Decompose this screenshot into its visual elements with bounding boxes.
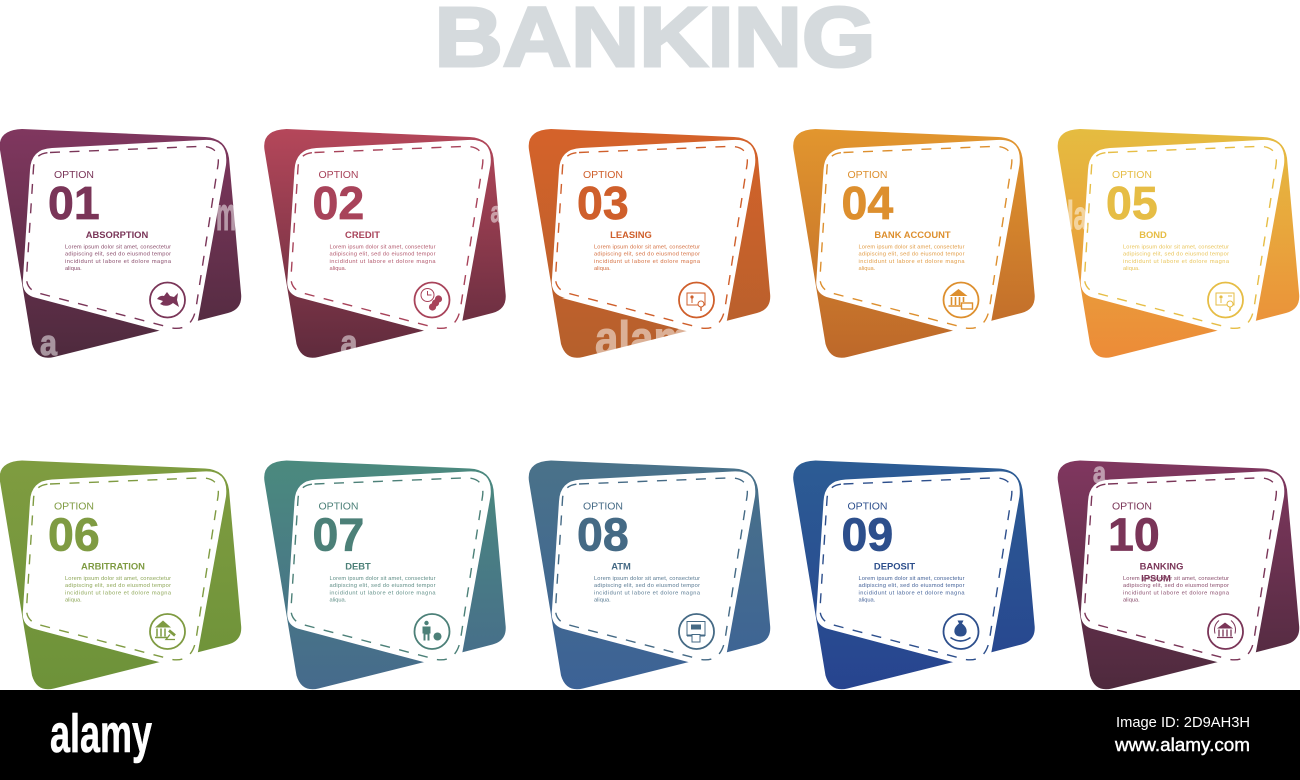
body text 06: incididunt ut labore et dolore magna	[65, 590, 172, 596]
body text 09: adipiscing elit, sed do eiusmod tempor	[858, 583, 965, 589]
body text 05	[1123, 244, 1230, 272]
heading bond: BOND	[1139, 229, 1167, 240]
number 06: 06	[48, 508, 100, 560]
option label 09: OPTION	[848, 500, 888, 512]
body text 07: adipiscing elit, sed do eiusmod tempor	[330, 583, 436, 589]
icon: person with debt coin	[414, 614, 450, 649]
panel: option 03 leasing: alam	[595, 313, 691, 366]
body text 07: aliqua.	[330, 598, 347, 604]
number 04: 04	[842, 177, 893, 229]
body text 04	[858, 244, 965, 272]
body text 04: incididunt ut labore et dolore magna	[858, 259, 965, 265]
body text 03: Lorem ipsum dolor sit amet, consectetur	[594, 244, 700, 250]
body text 08: incididunt ut labore et dolore magna	[594, 590, 701, 596]
icon: clock and coins	[414, 282, 450, 318]
body text 10: incididunt ut labore et dolore magna	[1123, 590, 1230, 596]
body text 05: Lorem ipsum dolor sit amet, consectetur	[1123, 244, 1229, 250]
body text 05: adipiscing elit, sed do eiusmod tempor	[1123, 252, 1229, 258]
body text 08	[594, 576, 701, 604]
body text 03: adipiscing elit, sed do eiusmod tempor	[594, 252, 700, 258]
body text 10: aliqua.	[1123, 598, 1140, 604]
image id: Image ID: 2D9AH3H	[1116, 714, 1250, 731]
icon: money bag over hand	[944, 614, 978, 649]
body text 06	[65, 576, 172, 604]
panel: option 05 bond: la	[1067, 194, 1087, 238]
option label 10: OPTION	[1112, 500, 1152, 512]
icon: bank in circular arrows	[1208, 614, 1243, 649]
panel: option 10 banking ipsum: a	[1093, 456, 1106, 490]
body text 03: aliqua.	[594, 266, 611, 272]
option label 04: OPTION	[848, 169, 888, 181]
panel: option 01 absorption: a	[40, 322, 58, 363]
body text 01: incididunt ut labore et dolore magna	[65, 259, 172, 265]
icon: bank and card	[944, 282, 978, 318]
body text 08: aliqua.	[594, 598, 611, 604]
panel: option 02 credit: a	[490, 196, 502, 229]
number 05: 05	[1106, 177, 1158, 229]
heading absorption: ABSORPTION	[86, 229, 148, 240]
body text 04: adipiscing elit, sed do eiusmod tempor	[858, 252, 965, 258]
body text 04: aliqua.	[858, 266, 876, 272]
heading atm: ATM	[611, 560, 631, 572]
heading leasing: LEASING	[610, 229, 652, 240]
option label 08: OPTION	[583, 500, 623, 512]
body text 07: incididunt ut labore et dolore magna	[330, 590, 436, 596]
panel: option 02 credit: a	[340, 322, 358, 363]
body text 06: aliqua.	[65, 598, 82, 604]
footer bar	[0, 690, 1300, 780]
body text 08: adipiscing elit, sed do eiusmod tempor	[594, 583, 700, 589]
panel: option 08 atm	[529, 460, 770, 689]
heading deposit: DEPOSIT	[874, 560, 915, 572]
panel: option 02 credit	[264, 129, 506, 363]
icon: bank and gavel	[150, 614, 185, 649]
panel: option 04 bank account	[793, 129, 1035, 358]
body text 10: Lorem ipsum dolor sit amet, consectetur	[1123, 576, 1229, 582]
heading banking ipsum	[1140, 560, 1183, 584]
body text 10	[1123, 576, 1230, 604]
icon: certificate key	[679, 282, 714, 318]
body text 07	[330, 576, 436, 604]
heading banking ipsum: IPSUM	[1141, 572, 1171, 584]
number 08: 08	[577, 508, 629, 560]
body text 09: incididunt ut labore et dolore magna	[858, 590, 965, 596]
body text 02: adipiscing elit, sed do eiusmod tempor	[330, 252, 436, 258]
body text 05: aliqua.	[1123, 266, 1140, 272]
body text 02: incididunt ut labore et dolore magna	[330, 259, 436, 265]
panel: option 01 absorption	[0, 129, 241, 363]
alamy logo: alamy	[50, 704, 152, 764]
body text 06: Lorem ipsum dolor sit amet, consectetur	[65, 576, 171, 582]
body text 09	[858, 576, 965, 604]
body text 01: Lorem ipsum dolor sit amet, consectetur	[65, 244, 171, 250]
body text 02: aliqua.	[330, 266, 347, 272]
option label 06: OPTION	[54, 500, 94, 512]
heading debt: DEBT	[345, 560, 371, 572]
body text 07: Lorem ipsum dolor sit amet, consectetur	[330, 576, 436, 582]
body text 01: adipiscing elit, sed do eiusmod tempor	[65, 252, 171, 258]
body text 03	[594, 244, 701, 272]
body text 10: adipiscing elit, sed do eiusmod tempor	[1123, 583, 1229, 589]
icon: fish	[150, 282, 185, 318]
icon: bond certificate	[1208, 282, 1243, 318]
panel: option 06 arbitration	[0, 460, 241, 689]
icon: atm machine	[679, 614, 714, 649]
option label 05: OPTION	[1112, 169, 1152, 181]
body text 06: adipiscing elit, sed do eiusmod tempor	[65, 583, 171, 589]
panel: option 07 debt	[264, 460, 506, 689]
panel: option 01 absorption: m	[216, 188, 236, 240]
body text 04: Lorem ipsum dolor sit amet, consectetur	[858, 244, 965, 250]
number 10: 10	[1108, 508, 1160, 560]
body text 01	[65, 244, 172, 272]
heading arbitration: ARBITRATION	[81, 560, 145, 572]
body text 02: Lorem ipsum dolor sit amet, consectetur	[330, 244, 436, 250]
number 02: 02	[312, 177, 364, 229]
heading banking ipsum: BANKING	[1140, 560, 1183, 572]
number 07: 07	[312, 508, 364, 560]
website: www.alamy.com	[1114, 735, 1250, 755]
panel: option 03 leasing	[529, 129, 770, 366]
body text 05: incididunt ut labore et dolore magna	[1123, 259, 1230, 265]
number 03: 03	[577, 177, 629, 229]
option label 03: OPTION	[583, 169, 623, 181]
body text 09: Lorem ipsum dolor sit amet, consectetur	[858, 576, 965, 582]
number 01: 01	[48, 177, 100, 229]
panel: option 10 banking ipsum	[1058, 456, 1299, 689]
heading credit: CREDIT	[345, 229, 380, 240]
body text 09: aliqua.	[858, 598, 876, 604]
body text 08: Lorem ipsum dolor sit amet, consectetur	[594, 576, 700, 582]
option label 01: OPTION	[54, 169, 94, 181]
number 09: 09	[842, 508, 893, 560]
panel: option 09 deposit	[793, 460, 1035, 689]
panel: option 05 bond	[1058, 129, 1299, 358]
option label 07: OPTION	[318, 500, 358, 512]
body text 03: incididunt ut labore et dolore magna	[594, 259, 701, 265]
body text 02	[330, 244, 436, 272]
heading bank account: BANK ACCOUNT	[874, 229, 951, 240]
option label 02: OPTION	[318, 169, 358, 181]
body text 01: aliqua.	[65, 266, 82, 272]
